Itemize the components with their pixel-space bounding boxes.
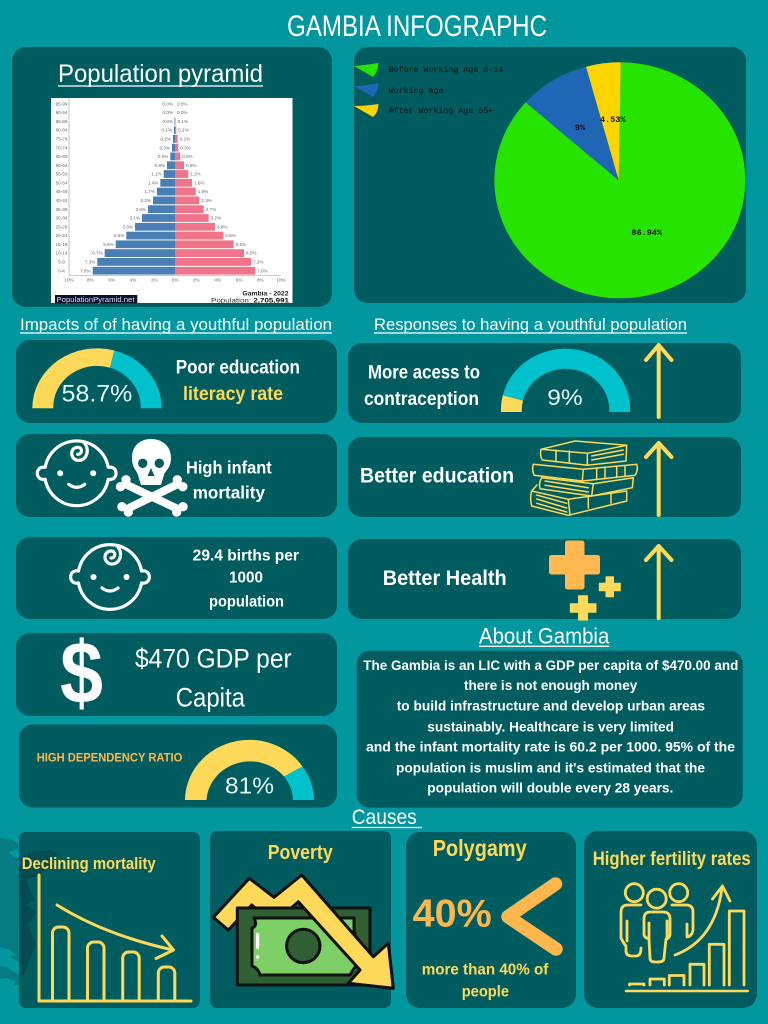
age labels: 0-4 [58, 268, 65, 273]
age labels: 70-74 [56, 145, 68, 150]
male percentage labels: 1.7% [145, 189, 155, 194]
text: polygamy: Polygamy [433, 835, 527, 861]
panel: age structure pie chart [354, 47, 746, 303]
male percentage labels: 2.6% [136, 207, 146, 212]
pie chart: 86.94% [631, 228, 663, 238]
male percentage labels: 1.4% [148, 180, 158, 185]
heading: responses: Responses to having a youthful population [374, 315, 687, 334]
text block: about gambia: sustainably. Healthcare is very limited [427, 719, 674, 735]
male percentage labels: 6.7% [92, 251, 103, 256]
female percentage labels: 0.0% [177, 110, 187, 115]
age labels: 75-79 [56, 136, 68, 142]
panel: about gambia text [357, 651, 743, 808]
axis labels: 4% [214, 278, 221, 282]
axis labels: 8% [87, 278, 94, 282]
text: poor education: Poor education [176, 358, 300, 378]
text: births per 1000 population [193, 548, 299, 611]
age labels: 50-54 [56, 180, 68, 185]
text: more than 40% of people: people [462, 984, 509, 1001]
female percentage labels: 0.2% [180, 136, 190, 142]
text: high dependency ratio: HIGH DEPENDENCY RATIO [37, 751, 182, 765]
axis labels: 6% [108, 278, 115, 282]
axis labels: 4% [130, 278, 136, 282]
female percentage labels: 3.2% [211, 216, 221, 221]
pie chart: 9% [575, 123, 586, 133]
female percentage labels: 0.1% [178, 119, 188, 124]
age labels: 95-99 [56, 101, 68, 106]
axis labels [64, 278, 286, 282]
female percentage labels: 0.3% [180, 145, 191, 150]
heading: impacts: Impacts of of having a youthful population [20, 315, 332, 334]
text: more than 40% of people: more than 40% of [422, 961, 549, 978]
arrow: up [646, 345, 672, 417]
chart: population pyramid [51, 98, 292, 305]
male percentage labels: 1.1% [151, 172, 162, 177]
axis labels: 8% [257, 278, 264, 282]
male percentage labels: 3.1% [130, 216, 140, 221]
text: more access to contraception: More acess to [368, 362, 480, 383]
panel: GDP per capita [16, 623, 337, 722]
text: births per 1000 population: population [209, 594, 284, 611]
female percentage labels: 3.8% [217, 224, 227, 229]
panel: high infant mortality [16, 434, 337, 517]
female percentage labels: 0.1% [178, 128, 189, 133]
text block: about gambia: to build infrastructure and develop urban areas [397, 698, 705, 714]
female percentage labels: 1.9% [198, 189, 208, 194]
icon: medical crosses [549, 540, 620, 620]
female percentage labels: 6.5% [246, 251, 256, 256]
male percentage labels: 0.5% [158, 154, 168, 159]
text block: about gambia: population is muslim and it's estimated that the [396, 760, 705, 776]
male percentage labels: 0.0% [163, 110, 173, 115]
male percentage labels: 0.2% [161, 136, 171, 142]
gauge: 81% [185, 740, 314, 800]
female percentage labels: 7.6% [257, 268, 268, 273]
panel: better health [348, 539, 741, 620]
axis labels: 10% [64, 278, 74, 282]
female percentage labels: 0.8% [186, 163, 196, 168]
text block: about gambia: and the infant mortality rate is 60.2 per 1000. 95% of the [366, 739, 735, 755]
panel: poor education [16, 340, 337, 423]
panel: declining mortality [19, 832, 200, 1008]
text: higher fertility rates: Higher fertility rates [593, 849, 751, 870]
text block: about gambia: The Gambia is an LIC with a GDP per capita of $470.00 and [363, 657, 738, 673]
female percentage labels: 7.2% [253, 260, 263, 264]
age labels: 35-39 [56, 207, 68, 212]
text: births per 1000 population: 1000 [229, 570, 263, 587]
text block: about gambia: population will double every 28 years. [427, 780, 673, 796]
chart caption [211, 291, 289, 305]
female percentage labels: 4.6% [225, 233, 236, 238]
male percentage labels: 7.3% [85, 260, 95, 264]
panel: poverty [210, 831, 393, 1008]
female percentage labels: 2.7% [206, 207, 216, 212]
gauge: literacy rate 58.7%: 58.7% [62, 381, 132, 408]
male percentage labels: 5.6% [103, 242, 114, 247]
panel: dependency ratio [19, 724, 337, 808]
gauge: 9% [501, 349, 630, 412]
stat: 40%: 40% [413, 893, 492, 936]
male percentage labels: 0.1% [162, 128, 172, 133]
text: more access to contraception [364, 362, 480, 410]
legend: Before Working Age 0-14 [389, 65, 503, 75]
text: GDP per capita [135, 643, 292, 713]
icon: baby face [71, 545, 149, 609]
age labels [56, 101, 68, 273]
male percentage labels: 3.8% [123, 224, 133, 229]
icon: stack of books [531, 441, 637, 515]
female percentage labels: 2.3% [201, 198, 212, 203]
text block: about gambia [363, 657, 738, 796]
male percentage labels: 0.0% [163, 101, 173, 106]
panel: higher fertility rates [584, 831, 757, 1008]
heading: causes: Causes [352, 806, 417, 829]
axis labels: 6% [236, 278, 242, 282]
text: better health: Better Health [383, 567, 507, 590]
age labels: 15-19 [56, 242, 68, 247]
male percentage labels [80, 101, 173, 273]
male percentage labels: 0.3% [160, 145, 170, 150]
male percentage labels: 4.6% [114, 233, 124, 238]
panel: better education [348, 437, 741, 517]
male percentage labels: 2.2% [141, 198, 151, 203]
female percentage labels: 5.5% [236, 242, 246, 247]
age labels: 10-14 [56, 251, 68, 256]
gauge: 9%: 9% [547, 385, 583, 410]
icon: baby face [37, 441, 116, 506]
text: more than 40% of people [422, 961, 549, 1001]
text: better education: Better education [360, 465, 514, 488]
arrow: up [646, 443, 672, 515]
chart icon: declining bars with arrow [39, 875, 191, 1001]
icon: skull and crossbones [116, 439, 188, 517]
text: high infant mortality: mortality [193, 482, 265, 502]
male bars [93, 117, 175, 275]
legend [354, 63, 503, 117]
arrow: up [646, 546, 672, 618]
age labels: 20-24 [56, 233, 68, 238]
age labels: 65-69 [56, 154, 68, 159]
chart caption: Gambia - 2022 [242, 291, 289, 298]
female percentage labels: 1.6% [194, 180, 204, 185]
female percentage labels: 0.5% [182, 154, 193, 159]
heading: population pyramid: Population pyramid [58, 60, 263, 88]
pie chart [494, 62, 745, 298]
male percentage labels: 0.8% [155, 163, 165, 168]
axis labels: 2% [193, 278, 200, 282]
age labels: 80-84 [56, 128, 68, 133]
text: GDP per capita: $470 GDP per [135, 643, 292, 673]
text: high infant mortality [186, 458, 272, 502]
text: poverty: Poverty [268, 842, 333, 864]
legend: Working age [389, 86, 443, 96]
female percentage labels: 1.2% [190, 172, 201, 177]
age labels: 5-9 [58, 260, 65, 264]
text: high infant mortality: High infant [186, 458, 272, 478]
source badge [55, 295, 137, 304]
axis labels: 10% [276, 278, 286, 282]
panel: polygamy [406, 832, 576, 1008]
title: GAMBIA INFOGRAPHC [287, 10, 547, 43]
gauge: 81%: 81% [225, 772, 274, 798]
female percentage labels: 0.0% [177, 101, 187, 106]
heading: about gambia: About Gambia [479, 623, 610, 648]
age labels: 40-44 [56, 198, 68, 203]
pie chart: 4.53% [600, 115, 626, 125]
legend: After Working Age 65+ [389, 106, 493, 116]
axis labels: 0% [172, 278, 178, 282]
female percentage labels [177, 101, 268, 273]
icon: people with rising bars [621, 884, 744, 985]
age labels: 90-94 [56, 110, 68, 115]
age labels: 45-49 [56, 189, 68, 194]
panel: more access to contraception [348, 343, 741, 423]
icon: money with falling arrow [213, 875, 393, 988]
chart caption: Population: 2,705,991 [211, 298, 289, 305]
male percentage labels: 7.8% [80, 268, 91, 273]
gauge: literacy rate 58.7% [32, 348, 162, 408]
age labels: 60-64 [56, 163, 68, 168]
icon: dollar sign: $ [60, 623, 103, 722]
text: births per 1000 population: 29.4 births per [193, 548, 299, 565]
age labels: 55-59 [56, 172, 68, 177]
age labels: 85-89 [56, 119, 68, 124]
text block: about gambia: there is not enough money [464, 677, 638, 693]
age labels: 30-34 [56, 216, 68, 221]
female bars [175, 117, 255, 275]
text: more access to contraception: contraception [364, 389, 479, 410]
text: GDP per capita: Capita [176, 683, 246, 713]
panel: birth rate [16, 537, 337, 619]
icon: less-than chevron [508, 884, 556, 949]
male percentage labels: 0.0% [163, 119, 173, 124]
axis labels: 2% [151, 278, 158, 282]
source badge: PopulationPyramid.net [56, 297, 135, 304]
panel: population pyramid [12, 47, 332, 307]
age labels: 25-29 [56, 224, 68, 229]
text: declining mortality: Declining mortality [22, 854, 156, 873]
text: literacy rate: literacy rate [183, 384, 283, 405]
